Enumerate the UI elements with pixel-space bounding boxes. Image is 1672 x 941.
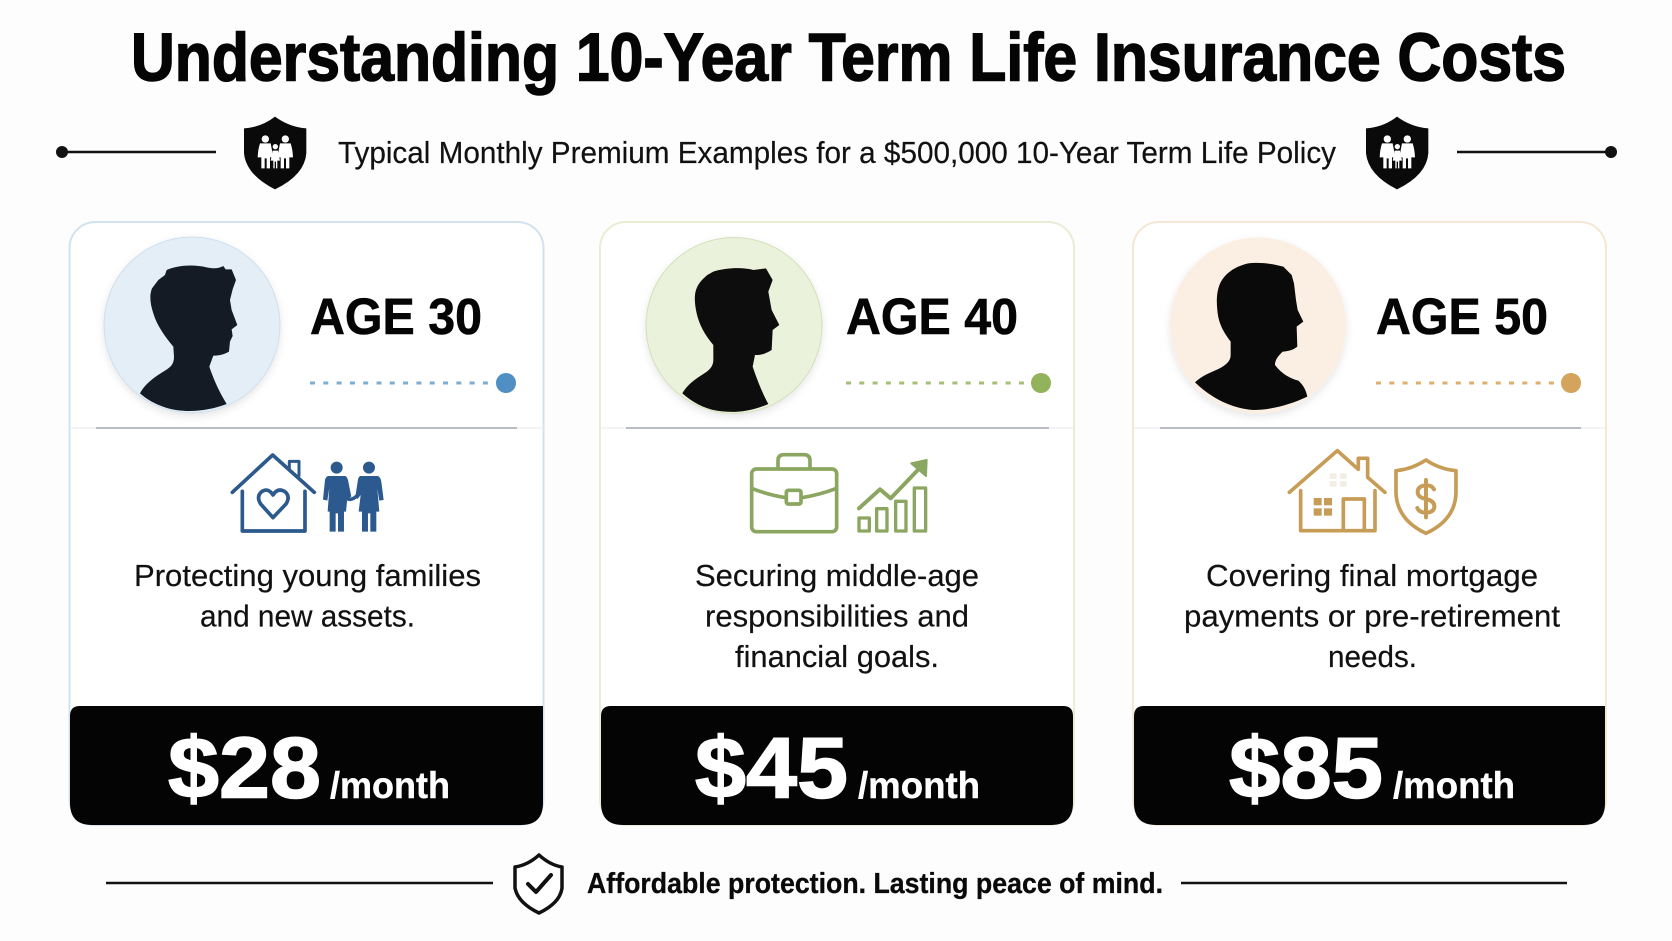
subtitle: Typical Monthly Premium Examples for a $500,000 10-Year Term Life Policy <box>338 135 1336 170</box>
price band: /month <box>858 765 980 806</box>
avatar: age 30 silhouette <box>104 237 280 413</box>
description: responsibilities and <box>705 598 969 634</box>
tagline text: Affordable protection. Lasting peace of mind. <box>587 868 1163 900</box>
description: Securing middle-age <box>695 558 979 593</box>
price band: $45 <box>695 720 848 816</box>
age label: AGE 30 <box>310 288 482 345</box>
timeline marker <box>846 373 1051 393</box>
description <box>134 558 481 634</box>
timeline marker <box>310 373 516 393</box>
subtitle band <box>56 117 1617 189</box>
description <box>695 558 979 674</box>
price band <box>1134 706 1605 825</box>
price band: /month <box>1393 765 1515 806</box>
price band <box>601 706 1073 825</box>
icon: family shield left <box>244 117 306 189</box>
price band: $85 <box>1229 720 1383 816</box>
age label: AGE 50 <box>1376 288 1548 345</box>
icon: check shield <box>515 855 562 913</box>
price band: /month <box>330 765 450 806</box>
description: and new assets. <box>200 598 415 634</box>
avatar: age 50 silhouette <box>1170 238 1346 414</box>
panel: age 50 <box>1133 222 1606 825</box>
price band <box>70 706 543 825</box>
icon: house and dollar shield <box>1289 451 1456 533</box>
icon: briefcase and growth chart <box>752 455 927 532</box>
age label: AGE 40 <box>846 288 1018 345</box>
description: Covering final mortgage <box>1206 558 1538 593</box>
panel: age 40 <box>600 222 1074 825</box>
description: needs. <box>1328 639 1417 674</box>
timeline marker <box>1376 373 1581 393</box>
price band: $28 <box>168 720 321 816</box>
footer tagline <box>106 855 1567 913</box>
description: financial goals. <box>735 639 939 674</box>
description: Protecting young families <box>134 558 481 593</box>
icon: family shield right <box>1366 117 1428 189</box>
description <box>1184 558 1560 674</box>
description: payments or pre-retirement <box>1184 598 1560 634</box>
panel: age 30 <box>70 222 544 825</box>
avatar: age 40 silhouette <box>646 238 822 414</box>
icon: house with heart and couple <box>232 455 384 532</box>
